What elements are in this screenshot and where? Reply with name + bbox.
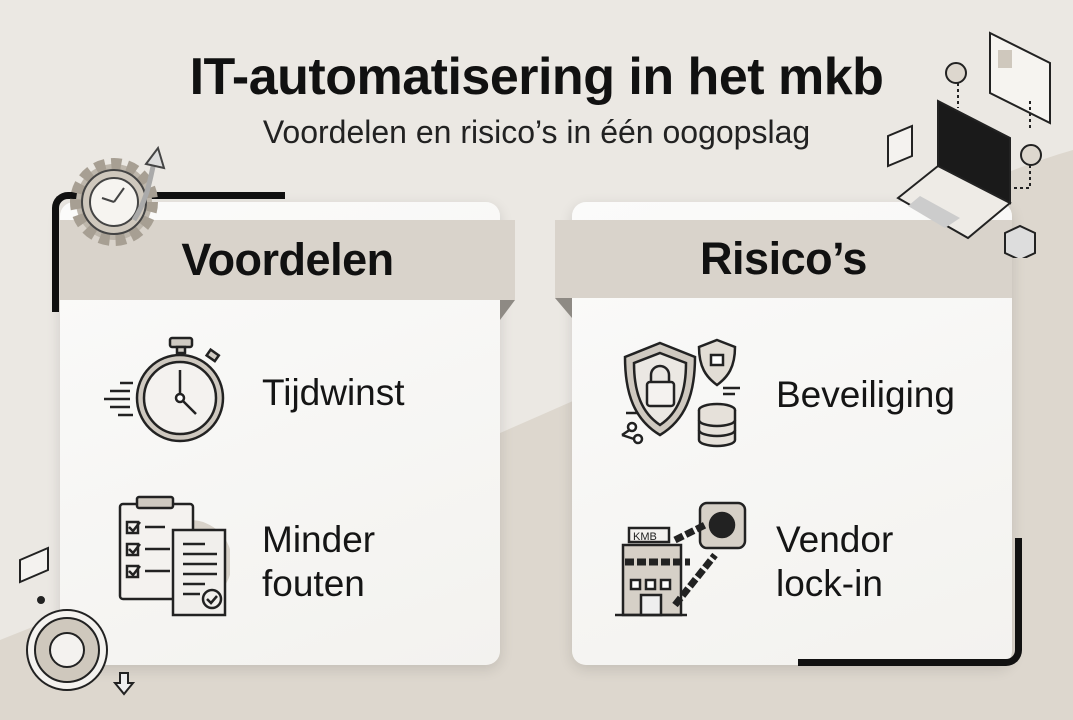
text: Tijdwinst: Tijdwinst bbox=[262, 372, 405, 413]
text: Beveiliging: Beveiliging bbox=[776, 374, 955, 415]
panel: voordelen bbox=[60, 202, 500, 665]
header: Risico's: Risico’s bbox=[700, 233, 867, 284]
header: Risico's bbox=[555, 220, 1012, 298]
black frame left bbox=[52, 192, 285, 312]
text: Vendor lock-in bbox=[776, 519, 893, 604]
icon: laptop illustration bbox=[887, 31, 1051, 258]
icon: gear clock bbox=[70, 146, 166, 246]
icon: vendor lock-in bbox=[615, 502, 746, 616]
text: Minder fouten: Minder bbox=[262, 519, 375, 560]
subtitle: Voordelen en risico’s in één oogopslag bbox=[263, 114, 810, 150]
text: Vendor lock-in: Vendor bbox=[776, 519, 893, 560]
title: IT-automatisering in het mkb bbox=[190, 48, 883, 106]
icon: bottom-left decorations bbox=[19, 546, 135, 696]
text: Minder fouten: fouten bbox=[262, 563, 365, 604]
header: Voordelen bbox=[60, 220, 515, 300]
text: Vendor lock-in: lock-in bbox=[776, 563, 883, 604]
icon: vendor lock-in: KMB bbox=[633, 531, 657, 543]
black frame right bbox=[798, 538, 1022, 666]
panel: risicos bbox=[572, 202, 1012, 665]
header: Voordelen: Voordelen bbox=[181, 234, 394, 285]
icon: checklist bbox=[118, 496, 230, 616]
icon: shield bbox=[621, 338, 740, 448]
text: Minder fouten bbox=[262, 519, 375, 604]
icon: stopwatch bbox=[104, 336, 224, 442]
fold right panel bbox=[555, 298, 572, 318]
fold left panel bbox=[500, 300, 515, 320]
